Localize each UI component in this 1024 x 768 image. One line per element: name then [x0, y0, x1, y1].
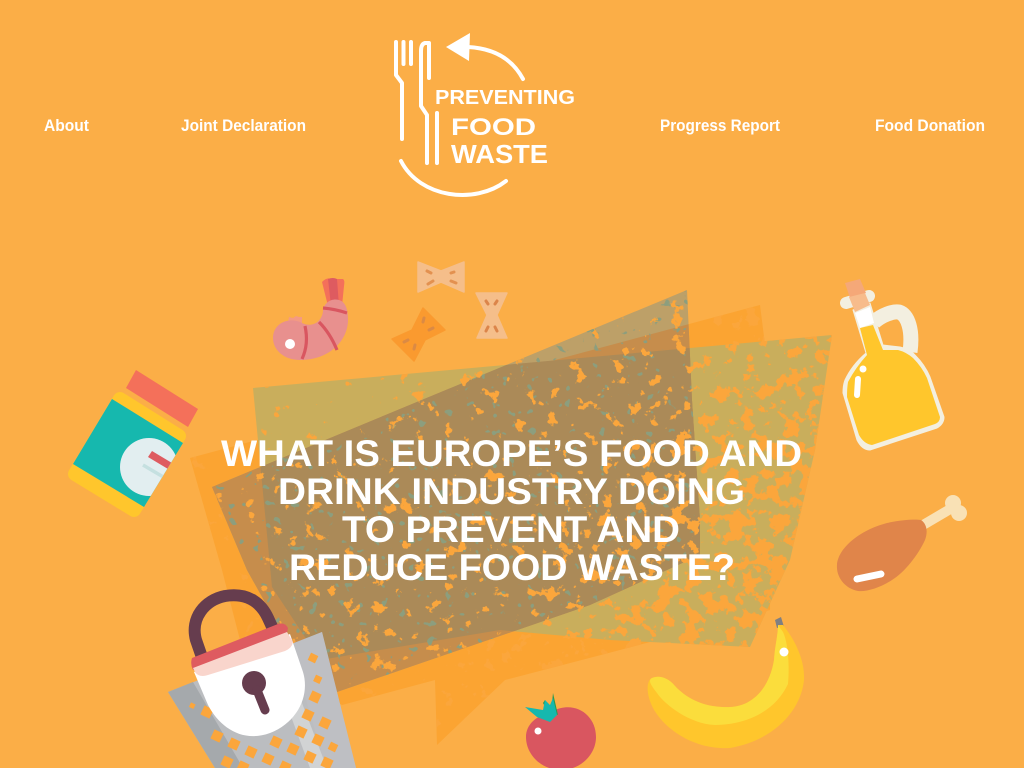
nav link: Food Donation: Food Donation: [875, 116, 985, 135]
icon: fork: [396, 42, 411, 139]
icon: knife: [421, 43, 437, 163]
jar body: [75, 399, 179, 510]
icon: jar: [73, 370, 198, 510]
cork lower: [849, 293, 870, 312]
logo wordmark: [435, 86, 575, 169]
bottle oil: [847, 325, 940, 445]
title: [221, 433, 802, 588]
title: WHAT IS EUROPE’S FOOD AND: [221, 433, 802, 474]
pink band: [193, 632, 293, 676]
title: TO PREVENT AND: [342, 509, 680, 550]
cork: [845, 279, 866, 298]
icon: pasta bow right: [476, 293, 507, 338]
icon: banana: [648, 617, 804, 748]
orange speckle texture: [192, 300, 832, 727]
icon: chicken leg: [837, 495, 967, 591]
icon: padlock: [191, 595, 305, 736]
red band: [191, 624, 288, 670]
jar lid: [126, 370, 198, 427]
logo wordmark: FOOD: [451, 114, 536, 141]
icon: circular arrow: [401, 33, 523, 195]
title: DRINK INDUSTRY DOING: [278, 471, 745, 512]
olive sheet: [253, 335, 832, 660]
icon: shrimp: [273, 278, 348, 360]
teal flecks: [216, 290, 695, 682]
drumstick: [837, 520, 927, 591]
logo wordmark: PREVENTING: [435, 86, 575, 109]
shackle: [195, 595, 279, 666]
icon: pasta bow top: [418, 262, 464, 292]
nav link: Joint Declaration: Joint Declaration: [181, 116, 306, 135]
jar label: [73, 399, 183, 507]
bottle handle: [874, 312, 911, 352]
title: REDUCE FOOD WASTE?: [289, 547, 735, 588]
navigation: [44, 116, 985, 135]
oil highlights: [857, 366, 866, 395]
bottle lip: [846, 296, 869, 303]
grater holes: [189, 653, 338, 768]
white body: [194, 634, 305, 736]
icon: tomato: [525, 693, 596, 768]
orange sheet with tail: [190, 305, 772, 745]
icon: oil bottle: [843, 279, 944, 450]
bottle outline: [843, 303, 944, 450]
logo wordmark: WASTE: [451, 139, 548, 169]
bone: [918, 495, 967, 528]
jar sticker: [120, 438, 178, 496]
speech bubble: layered textured sheets: [190, 290, 832, 745]
icon: pasta bow orange: [392, 308, 445, 361]
keyhole: [242, 671, 266, 710]
grey-brown sheet: [212, 290, 700, 692]
logo: Preventing Food Waste: [396, 33, 575, 195]
nav link: About: About: [44, 116, 89, 135]
icon: grater: [168, 632, 356, 768]
nav link: Progress Report: Progress Report: [660, 116, 780, 135]
bottle neck: [855, 307, 874, 328]
